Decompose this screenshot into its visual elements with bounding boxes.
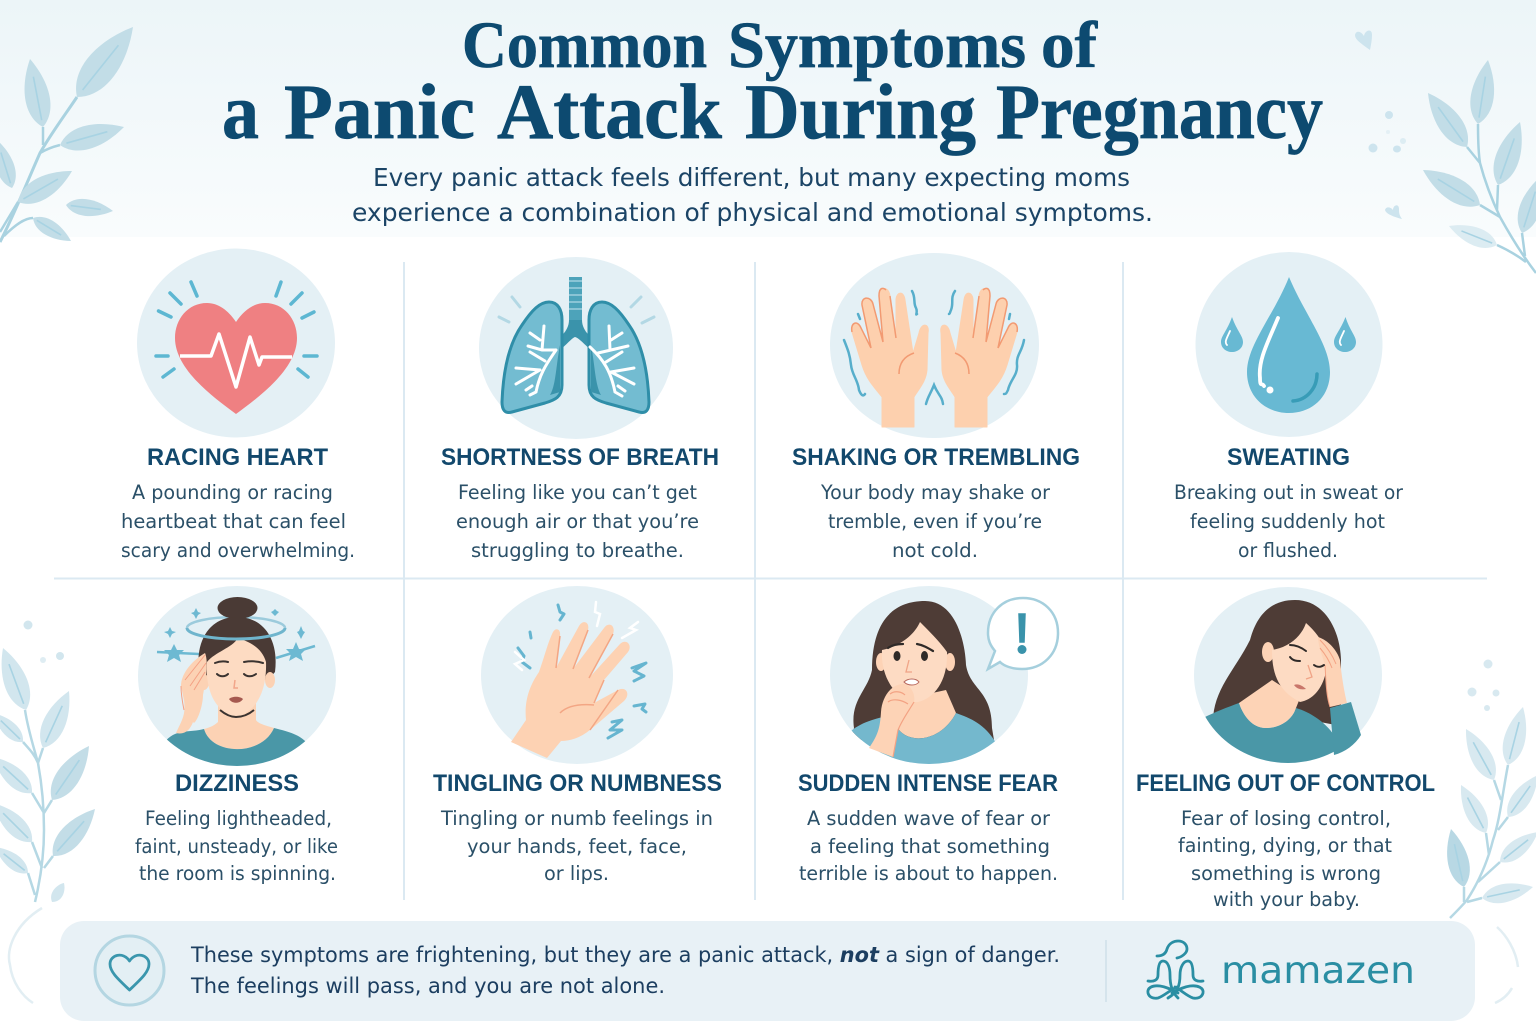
- icon: trembling hands: [830, 253, 1039, 438]
- footer message: The feelings will pass, and you are not alone.: [190, 974, 665, 999]
- decoration: bottom-left leaves: [0, 620, 103, 1003]
- title: Attack: [497, 68, 723, 155]
- text: feeling out of control description: [1178, 807, 1392, 911]
- icon: lungs: [479, 257, 673, 439]
- text: dizziness description: [135, 807, 338, 885]
- heading: shortness of breath: SHORTNESS OF BREATH: [441, 444, 719, 471]
- text: sudden intense fear description: A sudden wave of fear or: [807, 807, 1051, 830]
- text: tingling or numbness description: [440, 807, 713, 885]
- text: tingling or numbness description: your hands, feet, face,: [467, 835, 687, 858]
- text: sweating description: [1174, 481, 1404, 562]
- panel: racing heart: [121, 248, 355, 562]
- text: sweating description: feeling suddenly hot: [1190, 510, 1385, 533]
- text: feeling out of control description: Fear of losing control,: [1181, 807, 1391, 830]
- title: [222, 9, 1323, 155]
- text: shaking or trembling description: tremble, even if you’re: [828, 510, 1042, 533]
- panel: shortness of breath: [441, 257, 719, 562]
- text: sweating description: or flushed.: [1238, 539, 1338, 562]
- heading: shaking or trembling: SHAKING OR TREMBLING: [792, 444, 1080, 471]
- heading: dizziness: DIZZINESS: [175, 770, 299, 797]
- subtitle: experience a combination of physical and emotional symptoms.: [352, 198, 1153, 227]
- heading: sudden intense fear: SUDDEN INTENSE FEAR: [798, 770, 1058, 797]
- panel: feeling out of control: [1136, 587, 1435, 911]
- logo: mamazen: [1148, 941, 1415, 998]
- panel: tingling or numbness: [433, 586, 722, 885]
- text: shaking or trembling description: Your body may shake or: [820, 481, 1051, 504]
- footer banner: [60, 921, 1475, 1021]
- text: feeling out of control description: something is wrong: [1191, 862, 1381, 885]
- heading: racing heart: RACING HEART: [147, 444, 328, 471]
- text: racing heart description: [121, 481, 355, 562]
- text: sudden intense fear description: terrible is about to happen.: [799, 862, 1058, 885]
- logo: mamazen: mamazen: [1221, 949, 1415, 992]
- panel: dizziness: [135, 586, 338, 885]
- text: feeling out of control description: fainting, dying, or that: [1178, 834, 1392, 857]
- decoration: top-right leaves: [1417, 58, 1536, 273]
- icon: sweat drops: [1196, 252, 1382, 437]
- title: Common: [462, 9, 707, 82]
- text: shortness of breath description: [456, 481, 699, 562]
- text: racing heart description: scary and overwhelming.: [121, 539, 355, 562]
- text: shaking or trembling description: [820, 481, 1051, 562]
- text: tingling or numbness description: or lips.: [544, 862, 609, 885]
- decoration: top-left leaves: [0, 17, 145, 248]
- text: shaking or trembling description: not cold.: [892, 539, 978, 562]
- text: dizziness description: faint, unsteady, or like: [135, 835, 338, 858]
- text: shortness of breath description: struggling to breathe.: [471, 539, 684, 562]
- text: shortness of breath description: enough air or that you’re: [456, 510, 699, 533]
- decoration: bottom-right leaves: [1441, 660, 1536, 1003]
- heading: tingling or numbness: TINGLING OR NUMBNESS: [433, 770, 722, 797]
- text: racing heart description: A pounding or racing: [132, 481, 333, 504]
- title: a: [222, 68, 259, 155]
- text: sweating description: Breaking out in sweat or: [1174, 481, 1404, 504]
- text: sudden intense fear description: a feeling that something: [810, 835, 1050, 858]
- icon: dizzy woman: [138, 586, 336, 768]
- footer message: These symptoms are frightening, but they are a panic attack, not a sign of danger.: [190, 943, 1060, 968]
- icon: tingling hand: [481, 586, 673, 764]
- text: dizziness description: Feeling lightheaded,: [145, 807, 332, 830]
- text: sudden intense fear description: [799, 807, 1058, 885]
- subtitle: Every panic attack feels different, but many expecting moms: [373, 163, 1130, 192]
- footer message: [190, 943, 1060, 999]
- icon: heart with pulse: [137, 248, 335, 438]
- title: Symptoms: [728, 9, 1026, 82]
- title: of: [1041, 9, 1098, 82]
- heading: sweating: SWEATING: [1227, 444, 1350, 471]
- icon: speech bubble alert: [988, 598, 1058, 669]
- text: tingling or numbness description: Tingling or numb feelings in: [440, 807, 713, 830]
- title: During: [745, 68, 976, 155]
- text: racing heart description: heartbeat that can feel: [121, 510, 346, 533]
- panel: shaking or trembling: [792, 253, 1080, 562]
- panel: sweating: [1174, 252, 1404, 562]
- text: dizziness description: the room is spinning.: [139, 862, 336, 885]
- panel: sudden intense fear: [798, 586, 1058, 885]
- text: shortness of breath description: Feeling like you can’t get: [458, 481, 697, 504]
- heading: feeling out of control: FEELING OUT OF CONTROL: [1136, 770, 1435, 797]
- header background: [0, 0, 1536, 237]
- subtitle: [352, 163, 1153, 227]
- icon: heart badge: [95, 936, 164, 1005]
- title: Panic: [284, 68, 475, 155]
- icon: frightened woman: [830, 586, 1058, 770]
- text: feeling out of control description: with your baby.: [1213, 888, 1360, 911]
- icon: woman holding forehead: [1194, 587, 1382, 770]
- decoration: hearts and dots top right: [1355, 31, 1406, 219]
- title: Pregnancy: [996, 68, 1323, 155]
